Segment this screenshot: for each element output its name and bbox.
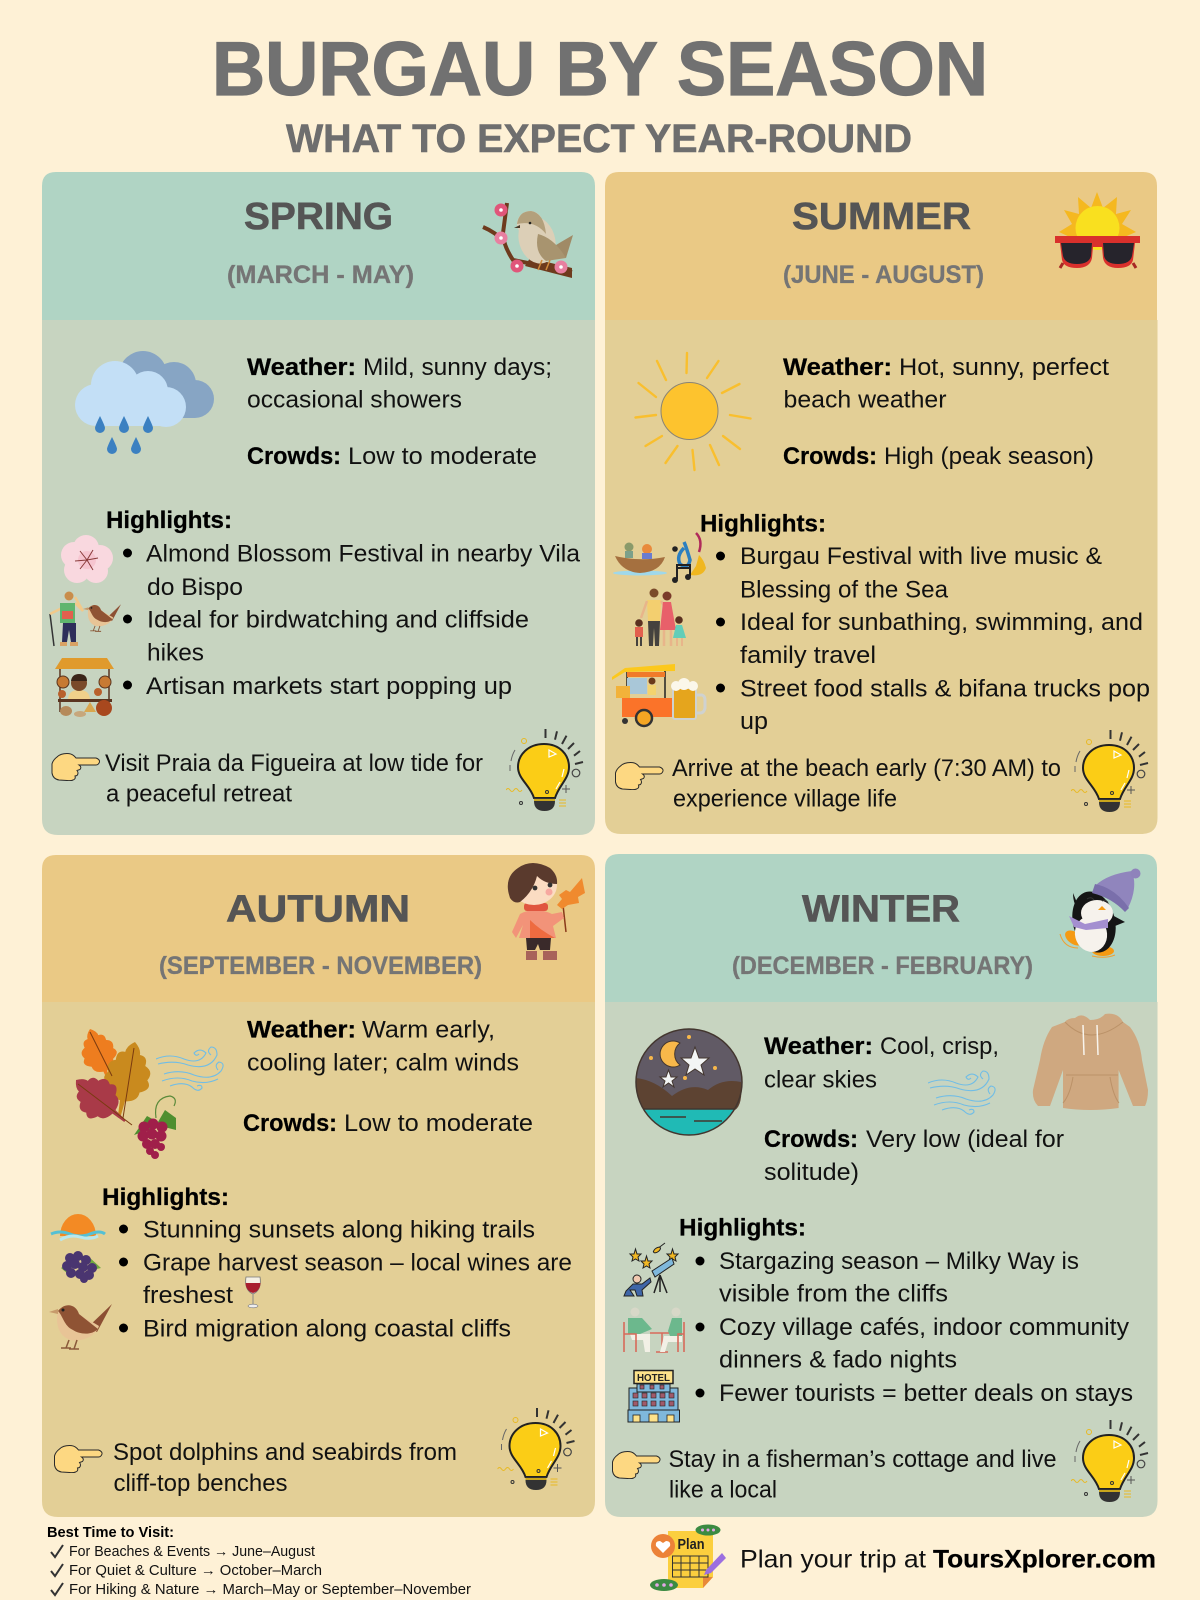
weather and crowds: autumn: Weather: [247, 1016, 356, 1044]
icon: almond blossom [61, 535, 113, 583]
highlights: spring: hikes [147, 640, 204, 666]
weather and crowds: autumn: Crowds: [243, 1110, 337, 1137]
icon: light bulb [498, 1408, 574, 1490]
icon: cafe diners [624, 1308, 684, 1352]
weather and crowds: summer [783, 354, 1109, 470]
icon: wind [928, 1071, 995, 1114]
highlights: spring: Artisan markets start popping up [146, 673, 512, 700]
highlights: autumn: Stunning sunsets along hiking trails [143, 1216, 535, 1244]
weather and crowds: spring: Crowds: [247, 443, 341, 470]
subtitle: WHAT TO EXPECT YEAR-ROUND [286, 117, 912, 161]
weather and crowds: spring: Weather: [247, 354, 356, 381]
weather and crowds: winter: Crowds: [764, 1126, 858, 1153]
icon: hotel building: HOTEL [637, 1372, 671, 1384]
icon: music notes [672, 533, 706, 583]
weather and crowds: winter: Cool, crisp, [880, 1033, 999, 1060]
best time to visit list: Best Time to Visit: [47, 1525, 174, 1541]
icon: wine glass [246, 1277, 260, 1308]
highlights: summer: Highlights: [700, 510, 826, 538]
icon: rain cloud [75, 351, 214, 454]
highlights: winter [679, 1214, 1133, 1407]
highlights: summer: Blessing of the Sea [740, 576, 949, 604]
call to action: Plan your trip at [740, 1546, 926, 1574]
icon: beer mug [671, 678, 705, 719]
icon: wind [156, 1047, 223, 1090]
tip: autumn: cliff-top benches [114, 1470, 288, 1497]
tip: summer [672, 755, 1061, 812]
icon: pointing hand [54, 1446, 102, 1473]
weather and crowds: spring [247, 354, 552, 470]
icon: pointing hand [612, 1452, 660, 1479]
highlights: winter: dinners & fado nights [719, 1346, 957, 1374]
icon: autumn leaves and grapes [63, 1023, 176, 1159]
icon: sunset over waves [51, 1214, 105, 1240]
highlights: spring [106, 507, 581, 700]
highlights: summer: Burgau Festival with live music & [740, 543, 1102, 570]
highlights: autumn: freshest [143, 1282, 233, 1309]
highlights: summer: Street food stalls & bifana trucks pop [740, 676, 1150, 702]
icon: hand-drawn sun [636, 353, 750, 470]
icon: hiker and bird [50, 592, 121, 646]
tip: summer: Arrive at the beach early (7:30 AM) to [672, 755, 1061, 782]
icon: boat with children [613, 542, 667, 576]
icon: trip plan [650, 1524, 726, 1591]
weather and crowds: winter [764, 1033, 1064, 1186]
highlights: autumn: Highlights: [102, 1184, 229, 1211]
highlights: winter: Fewer tourists = better deals on stays [719, 1380, 1133, 1407]
icon: hoodie [1033, 1014, 1148, 1110]
months: summer: (JUNE - AUGUST) [783, 261, 984, 289]
best time to visit list: For Quiet & Culture → October–March [69, 1563, 322, 1579]
call to action: ToursXplorer.com [933, 1546, 1156, 1574]
months: spring: (MARCH - MAY) [227, 261, 414, 289]
icon: artisan market stall [55, 658, 114, 717]
weather and crowds: winter: Very low (ideal for [866, 1126, 1064, 1153]
highlights: autumn: Bird migration along coastal cliffs [143, 1316, 511, 1342]
highlights: spring: do Bispo [147, 574, 243, 601]
weather and crowds: winter: clear skies [764, 1066, 877, 1094]
weather and crowds: autumn [243, 1016, 533, 1137]
tip: autumn: Spot dolphins and seabirds from [113, 1439, 457, 1466]
highlights: autumn: Grape harvest season – local wines are [143, 1250, 572, 1276]
highlights: winter: Cozy village cafés, indoor community [719, 1314, 1129, 1341]
icon: pointing hand [616, 763, 663, 790]
highlights: winter: Highlights: [679, 1214, 806, 1242]
title: BURGAU BY SEASON [212, 27, 988, 112]
best time to visit list: For Hiking & Nature → March–May or September–November [69, 1582, 471, 1598]
highlights: spring: Ideal for birdwatching and cliffside [147, 606, 529, 634]
tip: autumn [113, 1439, 457, 1497]
icon: hotel building [628, 1370, 680, 1422]
call to action [740, 1546, 1156, 1574]
icon: bird [49, 1304, 112, 1349]
weather and crowds: summer: Hot, sunny, perfect [899, 354, 1109, 381]
tip: winter: Stay in a fisherman’s cottage and live [668, 1446, 1056, 1473]
weather and crowds: summer: Weather: [783, 354, 892, 381]
icon: night sky with stars [636, 1029, 742, 1135]
highlights: summer [700, 510, 1150, 735]
icon: sun with sunglasses [1055, 192, 1140, 268]
weather and crowds: autumn: Warm early, [362, 1016, 495, 1044]
tip: winter: like a local [669, 1476, 777, 1504]
weather and crowds: autumn: Low to moderate [344, 1110, 533, 1137]
highlights: summer: Ideal for sunbathing, swimming, and [740, 609, 1143, 636]
months: winter: (DECEMBER - FEBRUARY) [732, 952, 1033, 980]
weather and crowds: summer: High (peak season) [884, 443, 1094, 470]
weather and crowds: winter: solitude) [764, 1159, 859, 1186]
icon: purple grapes [61, 1251, 101, 1283]
weather and crowds: winter: Weather: [764, 1033, 873, 1060]
icon: penguin skating [1060, 868, 1140, 957]
tip: spring: a peaceful retreat [106, 780, 292, 808]
icon: light bulb [1071, 1420, 1148, 1502]
highlights: summer: family travel [740, 642, 876, 669]
icon: light bulb [506, 729, 583, 811]
tip: winter [668, 1446, 1056, 1504]
tip: spring: Visit Praia da Figueira at low tide for [105, 750, 483, 777]
weather and crowds: spring: Mild, sunny days; [363, 354, 552, 381]
icon: pointing hand [52, 754, 100, 781]
months: autumn: (SEPTEMBER - NOVEMBER) [159, 952, 482, 980]
icon: child holding leaf [508, 863, 585, 960]
panel: summer [605, 172, 1158, 834]
icon: stargazer with telescope [624, 1243, 678, 1296]
tip: spring [105, 750, 483, 808]
icon: street food cart [612, 664, 675, 726]
panel: spring [42, 172, 595, 835]
best time to visit list [47, 1525, 471, 1598]
highlights: winter: Stargazing season – Milky Way is [719, 1248, 1079, 1275]
highlights: spring: Almond Blossom Festival in nearby Vila [146, 540, 581, 568]
icon: light bulb [1071, 730, 1148, 812]
icon: trip plan: Plan [678, 1537, 704, 1553]
weather and crowds: summer: Crowds: [783, 443, 877, 470]
best time to visit list: For Beaches & Events → June–August [69, 1544, 315, 1560]
heading: autumn: AUTUMN [226, 888, 410, 930]
highlights: winter: visible from the cliffs [719, 1280, 948, 1308]
highlights: summer: up [740, 708, 768, 735]
heading: winter: WINTER [802, 888, 960, 930]
panel: autumn [42, 855, 595, 1517]
weather and crowds: spring: Low to moderate [348, 443, 537, 470]
panel: winter [605, 854, 1158, 1517]
heading: summer: SUMMER [792, 196, 971, 238]
check marks [51, 1545, 63, 1595]
weather and crowds: autumn: cooling later; calm winds [247, 1050, 519, 1076]
weather and crowds: spring: occasional showers [247, 386, 462, 414]
weather and crowds: summer: beach weather [784, 386, 946, 414]
icon: bird on blossom branch [483, 203, 573, 278]
highlights: spring: Highlights: [106, 507, 232, 534]
heading: spring: SPRING [244, 196, 393, 238]
highlights: autumn [102, 1184, 572, 1342]
tip: summer: experience village life [673, 786, 897, 812]
icon: family [635, 588, 686, 646]
